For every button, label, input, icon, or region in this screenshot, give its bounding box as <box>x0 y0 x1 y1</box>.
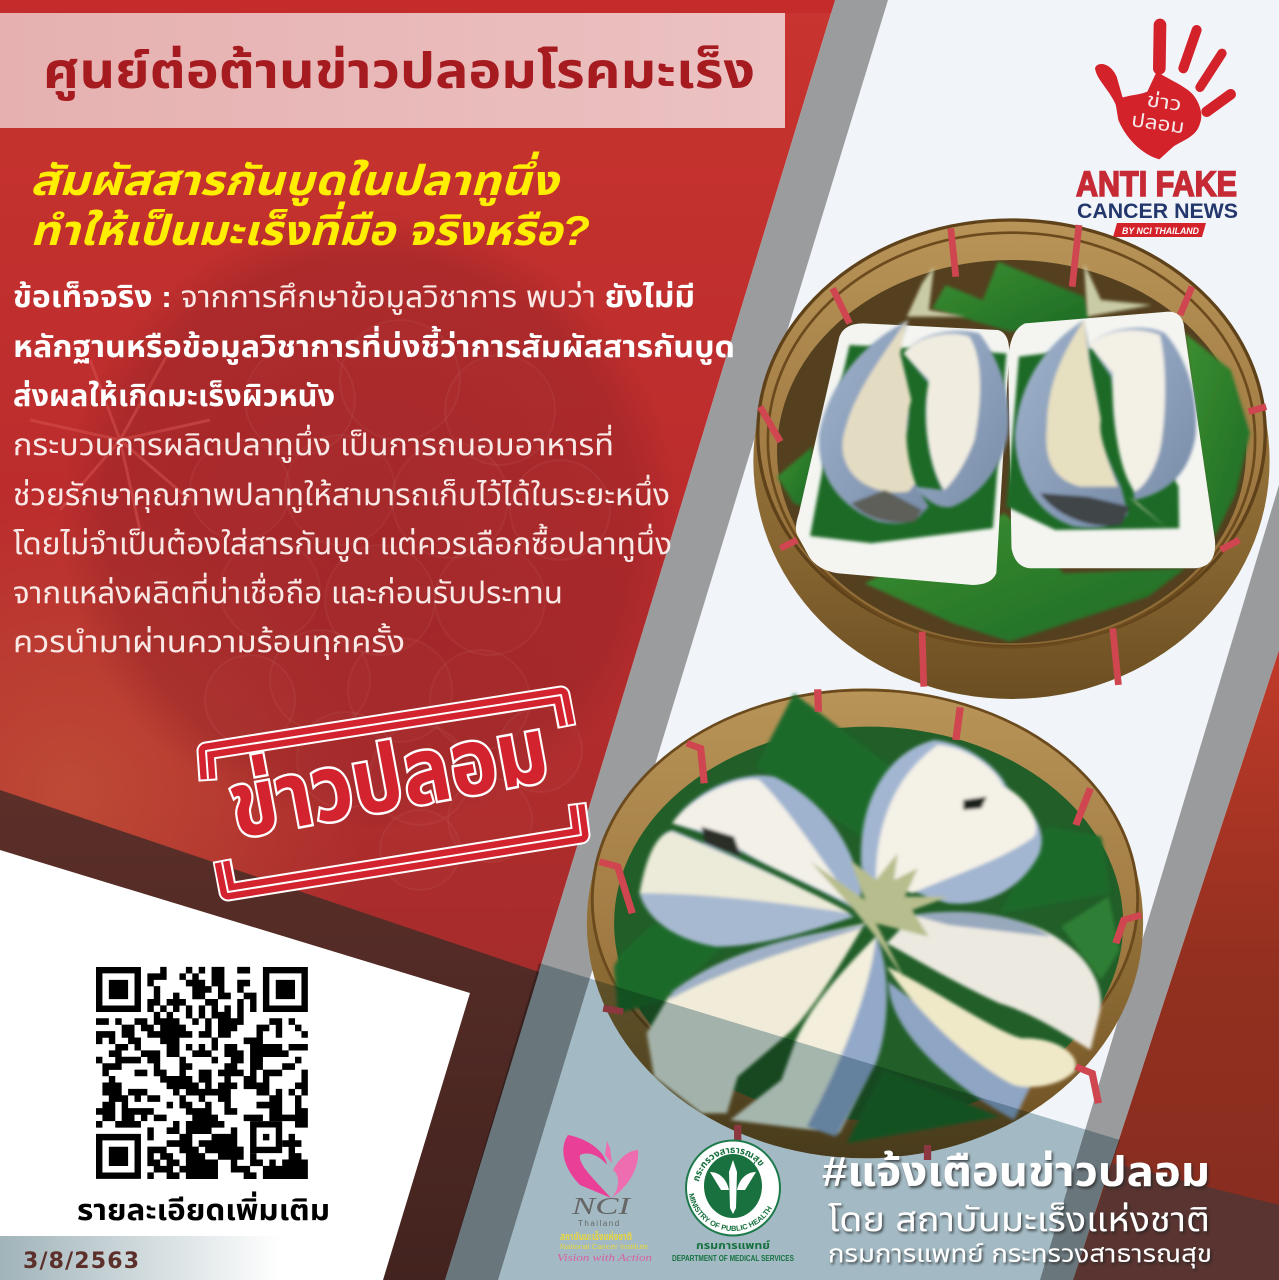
fact text block: หลักฐานหรือข้อมูลวิชาการที่บ่งชี้ว่าการสัมผัสสารกันบูด <box>13 325 735 365</box>
fact text block: ส่งผลให้เกิดมะเร็งผิวหนัง <box>13 379 335 413</box>
logo: national cancer institute: สถาบันมะเร็งแห่งชาติ <box>560 1230 632 1243</box>
panel: translucent teal overlay <box>445 963 1120 1280</box>
logo: anti fake cancer news <box>1076 25 1238 237</box>
fact text block: โดยไม่จำเป็นต้องใส่สารกันบูด แต่ควรเลือกซื้อปลาทูนึ่ง <box>13 523 672 562</box>
leaves <box>614 693 1119 1143</box>
fish petals <box>640 740 1101 1137</box>
panel: dark brown corner overlay <box>1073 1163 1279 1280</box>
finder patterns <box>96 967 308 1179</box>
footer campaign text: กรมการแพทย์ กระทรวงสาธารณสุข <box>828 1240 1212 1269</box>
fact text block: กระบวนการผลิตปลาทูนึ่ง เป็นการถนอมอาหารที่ <box>13 424 614 463</box>
icon: pink butterfly <box>563 1135 638 1198</box>
logo: national cancer institute: Thailand <box>578 1219 621 1228</box>
logo: ministry of public health: กระทรวงสาธารณสุข <box>694 1148 764 1182</box>
stamp: fake news: ข่าวปลอม <box>221 699 556 858</box>
QR caption: รายละเอียดเพิ่มเติม <box>77 1191 330 1227</box>
headline question <box>30 151 590 254</box>
virus spikes <box>30 350 210 530</box>
logo: national cancer institute: National Cancer Institute <box>560 1242 648 1251</box>
date strip <box>0 1236 280 1280</box>
fish left <box>819 267 1009 524</box>
footer campaign text: #แจ้งเตือนข่าวปลอม <box>822 1148 1210 1195</box>
fact text block: ช่วยรักษาคุณภาพปลาทูให้สามารถเก็บไว้ได้ในระยะหนึ่ง <box>13 474 670 513</box>
panel: gray diagonal band <box>445 0 888 1280</box>
fish right <box>1015 263 1196 528</box>
logo: anti fake cancer news: CANCER NEWS <box>1077 200 1238 223</box>
logo: national cancer institute: NCI <box>571 1194 631 1220</box>
footer campaign text <box>822 1148 1212 1269</box>
fact text block: ข้อเท็จจริง : จากการศึกษาข้อมูลวิชาการ พบว่า ยังไม่มี <box>13 280 695 315</box>
logo: national cancer institute: Vision with Action <box>557 1253 652 1264</box>
logo: ministry of public health <box>672 1140 795 1263</box>
logo: national cancer institute <box>557 1135 652 1264</box>
tray leaves <box>810 345 1179 543</box>
tray right <box>1008 312 1215 568</box>
red ties <box>760 225 1266 687</box>
panel: brown diagonal band <box>0 790 539 1280</box>
icon: red hand print <box>1095 25 1231 159</box>
headline question: สัมผัสสารกันบูดในปลาทูนึ่ง <box>30 151 561 207</box>
title: ศูนย์ต่อต้านข่าวปลอมโรคมะเร็ง <box>43 43 755 101</box>
header band <box>0 13 785 128</box>
photo: basket of steamed mackerel on trays <box>753 220 1270 699</box>
date strip: 3/8/2563 <box>23 1249 139 1274</box>
photo: basket of mackerel arranged as a flower <box>587 688 1143 1160</box>
icon: caduceus <box>710 1160 756 1214</box>
panel: red article background <box>0 0 835 1280</box>
footer campaign text: โดย สถาบันมะเร็งแห่งชาติ <box>828 1201 1210 1239</box>
icon: red hand print: ข่าว <box>1145 88 1183 116</box>
fact text block: จากแหล่งผลิตที่น่าเชื่อถือ และก่อนรับประทาน <box>13 572 563 610</box>
fact text block <box>13 280 735 660</box>
panel: red diagonal tip <box>1073 650 1279 1280</box>
logo: anti fake cancer news: BY NCI THAILAND <box>1122 226 1199 237</box>
fact text block: ควรนำมาผ่านความร้อนทุกครั้ง <box>13 623 405 660</box>
cancer cell texture <box>30 210 680 890</box>
logo: ministry of public health: MINISTRY OF PUBLIC HEALTH <box>688 1193 772 1231</box>
tray left <box>796 323 1009 585</box>
logo: anti fake cancer news: ANTI FAKE <box>1076 165 1237 204</box>
logo: ministry of public health: DEPARTMENT OF MEDICAL SERVICES <box>672 1254 795 1263</box>
icon: red hand print: ปลอม <box>1130 110 1186 138</box>
logo: ministry of public health: กรมการแพทย์ <box>696 1240 770 1252</box>
QR code <box>96 967 308 1179</box>
banana leaves <box>777 262 1250 642</box>
red ties <box>600 689 1141 1160</box>
panel: white QR area <box>0 850 470 1280</box>
headline question: ทำให้เป็นมะเร็งที่มือ จริงหรือ? <box>30 201 590 254</box>
data modules <box>96 970 308 1176</box>
panel: right gray stripe <box>1040 485 1279 1280</box>
